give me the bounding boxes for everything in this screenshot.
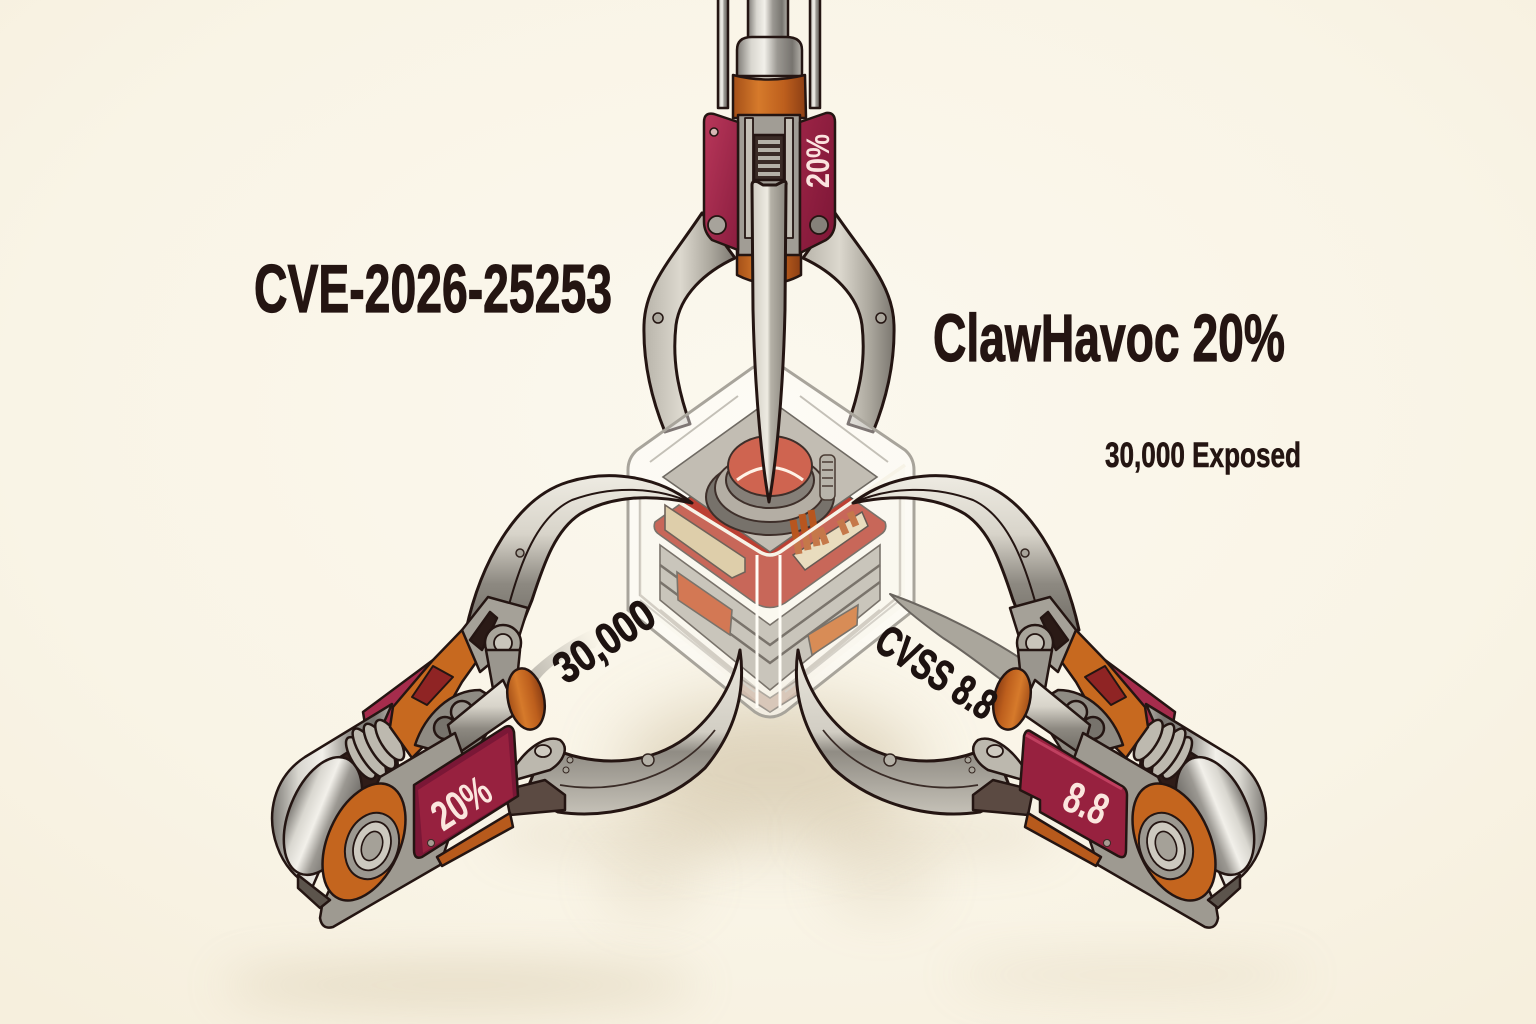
top plate (663, 400, 877, 552)
right arm lower claw (796, 650, 1013, 814)
exposed instances caption: 30,000 Exposed (1105, 436, 1301, 475)
left arm mechanism (268, 597, 565, 928)
centre yoke (738, 115, 800, 255)
cube front highlights (640, 396, 905, 708)
right badge (1020, 731, 1127, 857)
cast shadows (220, 700, 1310, 1007)
plate label: 20% (800, 134, 836, 188)
curved label: 30,000: 30,000 (544, 590, 664, 693)
badge value: 8.8 (1056, 772, 1116, 835)
central piston (748, 0, 788, 46)
top claw side fingers (644, 213, 894, 432)
copper coil and striped column (793, 455, 868, 570)
lower left fading claw (522, 622, 610, 685)
heading: CVE id: CVE-2026-25253 (254, 251, 612, 327)
right arm mechanism (973, 597, 1270, 928)
cube back shell (628, 363, 914, 717)
lower copper sleeve (737, 250, 801, 284)
central blade (752, 181, 786, 502)
right crimson plate (800, 113, 835, 253)
lower right thin claw (890, 594, 1033, 684)
badge value: 20% (422, 766, 500, 840)
left badge (414, 726, 518, 858)
lower layered core (654, 440, 886, 712)
transparent cube with mechanism (628, 363, 914, 717)
left arm lower claw (525, 650, 742, 814)
beige circuit board (665, 505, 745, 578)
curved label: CVSS 8.8: CVSS 8.8 (867, 616, 1005, 729)
guide rods (718, 0, 820, 108)
heading: campaign share: ClawHavoc 20% (933, 301, 1285, 376)
copper collar (733, 75, 806, 118)
silver collar (737, 37, 802, 76)
right arm upper claw (853, 476, 1079, 642)
glass tint over mechanism (640, 465, 905, 712)
top claw arm (704, 0, 836, 284)
left crimson plate (704, 114, 738, 250)
left arm upper claw (466, 476, 692, 642)
red dome stack (706, 436, 834, 535)
inner frame lines (640, 490, 900, 700)
